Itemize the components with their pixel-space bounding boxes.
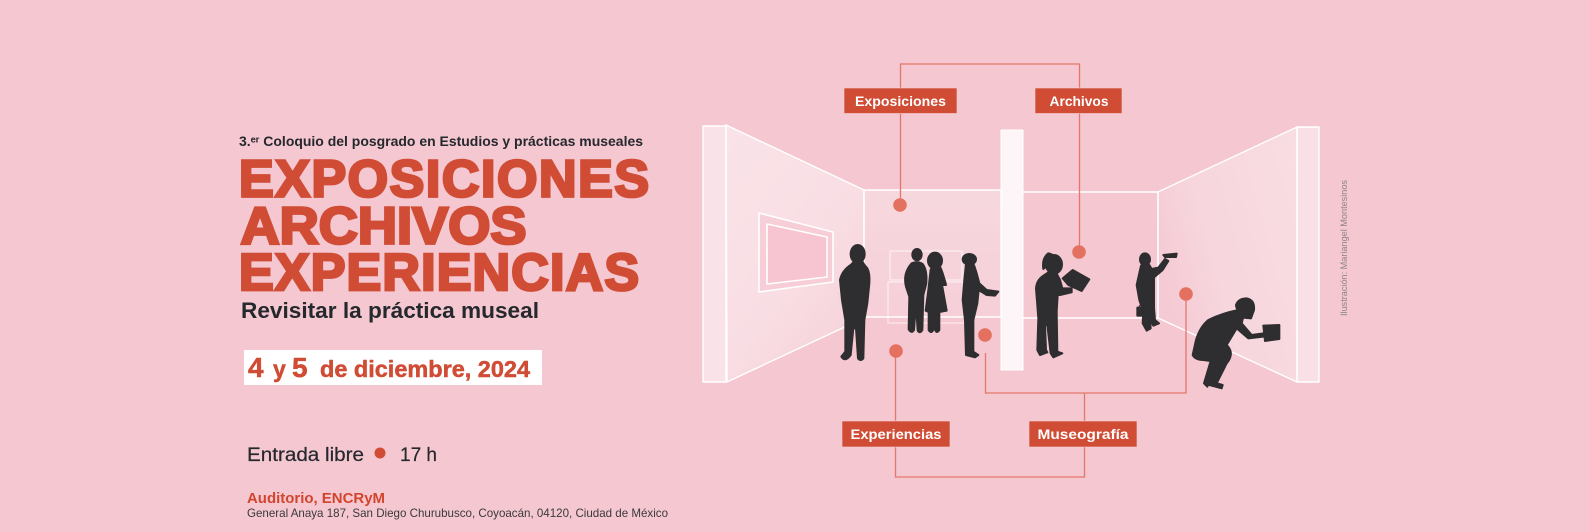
- silhouette: crouching woman with box: [1193, 298, 1279, 388]
- framed picture: [759, 213, 833, 292]
- label: Archivos: [1035, 88, 1122, 114]
- date box: 4: [248, 352, 264, 383]
- connector lines: [896, 64, 1186, 477]
- centre column: [1001, 130, 1023, 370]
- label: Exposiciones: [844, 88, 957, 114]
- date box: 5: [292, 352, 308, 383]
- illustration: museum room: [703, 125, 1319, 382]
- woman in dress: [926, 253, 947, 332]
- date box: [244, 350, 542, 385]
- illustration credit: Ilustración: Mariangel Montesinos: [1339, 180, 1350, 316]
- label: Museografía: Museografía: [1038, 426, 1129, 442]
- woman reading book: [1036, 253, 1089, 357]
- venue: General Anaya 187, San Diego Churubusco, Coyoacán, 04120, Ciudad de México: [247, 506, 668, 520]
- main title: EXPERIENCIAS: [239, 244, 639, 302]
- silhouettes: right group: [1036, 253, 1177, 357]
- date box: y: [273, 356, 286, 382]
- venue: Auditorio, ENCRyM: [247, 491, 385, 507]
- man from behind: [905, 249, 927, 332]
- admission and time: [247, 445, 437, 466]
- venue: [247, 491, 668, 520]
- painter with roller: [1137, 253, 1177, 331]
- main title: EXPOSICIONES: [239, 150, 649, 208]
- back wall left section: [864, 190, 1001, 317]
- display case: [888, 251, 965, 323]
- marker dots: [889, 198, 1193, 358]
- label: Archivos: Archivos: [1050, 93, 1109, 109]
- left wall: [726, 125, 864, 382]
- date box: de diciembre, 2024: [320, 356, 530, 382]
- label: Exposiciones: Exposiciones: [855, 93, 946, 109]
- label: Experiencias: Experiencias: [850, 426, 942, 442]
- main title: ARCHIVOS: [240, 198, 526, 256]
- silhouettes: left group: [840, 245, 998, 360]
- person standing: [840, 245, 869, 360]
- event text block: [239, 134, 649, 323]
- admission and time: Entrada libre: [247, 445, 364, 466]
- label: Museografía: [1029, 421, 1137, 447]
- main title: [239, 150, 649, 302]
- admission and time: 17 h: [400, 445, 437, 466]
- subtitle: colloquium: 3.ᵉʳ Coloquio del posgrado en Estudios y prácticas museales: [239, 134, 643, 149]
- right wall end: [1297, 127, 1319, 382]
- left wall end: [703, 126, 726, 382]
- tagline: Revisitar la práctica museal: [241, 298, 539, 323]
- label: Experiencias: [842, 421, 950, 447]
- back wall right section: [1023, 192, 1158, 318]
- person pointing: [963, 254, 998, 357]
- right wall: [1158, 127, 1297, 382]
